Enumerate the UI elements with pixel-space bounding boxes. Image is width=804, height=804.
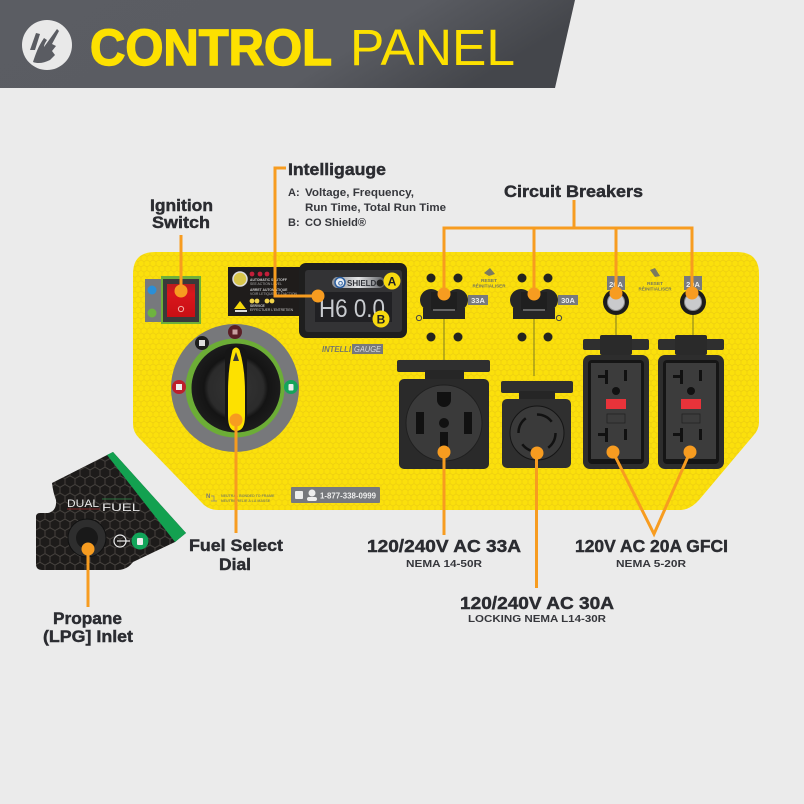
icon: inlet arrow (114, 535, 130, 547)
propane connector (68, 519, 106, 557)
reset labels: RÉINITIALISER (472, 282, 506, 290)
phone number tag (291, 487, 380, 503)
arrow: 30A outlet (535, 453, 538, 588)
label: propane inlet (43, 609, 133, 646)
arrow: fuel select dial (234, 420, 238, 533)
arrow: intelligauge (275, 168, 318, 296)
panel: yellow control panel (133, 252, 759, 510)
label: intelligauge: CO Shield® (305, 217, 366, 229)
label: ignition switch: Switch (152, 214, 210, 232)
arrow: propane inlet (86, 549, 90, 607)
label: ignition switch (150, 197, 213, 232)
fuel select dial (171, 324, 299, 452)
green band (107, 452, 186, 542)
dual fuel logo: FUEL (102, 502, 140, 514)
label: intelligauge: Voltage, Frequency, (305, 187, 414, 199)
warning sticker: VOIR LETIQUETTE D'ACTION (250, 292, 298, 296)
breaker 30A: 30A (561, 296, 575, 305)
label: 30A outlet: 120/240V AC 30A (460, 593, 614, 613)
badge B: B (377, 312, 386, 326)
leader dots (82, 284, 698, 556)
label: intelligauge: Intelligauge (288, 160, 386, 179)
outlet NEMA L14-30R (501, 381, 573, 468)
warning sticker: SEE ACTION LEVEL (250, 282, 282, 286)
label: fuel select dial (189, 536, 283, 574)
CO Shield badge: O (338, 280, 343, 288)
CO Shield badge (332, 277, 385, 288)
GFCI breaker 2: 20A (686, 280, 700, 289)
label: intelligauge: A: (288, 187, 300, 199)
arrow: circuit breakers (444, 200, 692, 294)
label: GFCI outlets: NEMA 5-20R (616, 558, 686, 570)
badge A: A (388, 274, 397, 288)
Intelligauge display (299, 263, 407, 338)
thin connector lines (444, 315, 693, 376)
title: PANEL (350, 19, 515, 76)
warning sticker: ARRET AUTOMATIQUE (250, 288, 288, 292)
label: propane inlet: (LPG] Inlet (43, 627, 133, 646)
reset labels: RESET (481, 278, 497, 284)
CO Shield badge: SHIELD (347, 279, 377, 288)
icon: propane tank (132, 532, 148, 550)
warning sticker: AUTOMATIC SHUTOFF (250, 278, 287, 282)
neutral bonding note: NEUTRAL BONDED TO FRAME (221, 494, 275, 498)
Intelligauge logo: GAUGE (354, 344, 381, 354)
label: 33A outlet (367, 536, 521, 570)
icon: hand pointing logo (22, 20, 72, 70)
reset labels: RESET (647, 281, 663, 287)
label: intelligauge: Run Time, Total Run Time (305, 202, 446, 214)
reset labels (472, 268, 672, 292)
title: CONTROL (90, 19, 332, 76)
GFCI breaker 1 (603, 276, 629, 315)
neutral bonding note: NEUTRE RELIE A LA MASSE (221, 499, 271, 503)
label: fuel select dial: Fuel Select (189, 536, 283, 555)
warning sticker: EFFECTUER L'ENTRETIEN (250, 308, 294, 312)
label: GFCI outlets: 120V AC 20A GFCI (575, 536, 728, 556)
reset labels: RÉINITIALISER (638, 284, 672, 292)
arrow: 33A outlet (442, 452, 446, 535)
warning sticker (228, 267, 303, 316)
ignition switch (145, 276, 201, 324)
title (90, 19, 515, 76)
dual fuel logo (67, 498, 140, 514)
dual fuel logo: DUAL (67, 498, 99, 510)
label: fuel select dial: Dial (219, 555, 251, 574)
breaker 33A: 33A (471, 296, 485, 305)
arrow: leader lines (88, 168, 692, 607)
label: ignition switch: Ignition (150, 197, 213, 215)
arrow: GFCI outlets (613, 452, 690, 534)
label: circuit breakers: Circuit Breakers (504, 182, 643, 201)
Intelligauge logo: INTELLI (322, 344, 352, 354)
breaker 33A (416, 289, 488, 321)
arrow: ignition switch (180, 235, 182, 291)
phone number tag: 1-877-338-0999 (320, 492, 377, 500)
label: 30A outlet: LOCKING NEMA L14-30R (468, 613, 606, 625)
Intelligauge logo (322, 344, 383, 354)
warning sticker: SERVICE (250, 304, 266, 308)
outlet GFCI right (658, 335, 724, 469)
readout: H6 0.0 (319, 295, 385, 323)
neutral bonding note: N (206, 494, 210, 500)
label: 33A outlet: NEMA 14-50R (406, 558, 482, 570)
breaker 30A (510, 289, 578, 321)
label: GFCI outlets (575, 536, 728, 570)
label: propane inlet: Propane (53, 609, 122, 628)
outlet NEMA 14-50R (397, 360, 490, 469)
label: intelligauge: B: (288, 217, 300, 229)
label: 30A outlet (460, 593, 614, 625)
label: 33A outlet: 120/240V AC 33A (367, 536, 521, 556)
header banner (0, 0, 575, 88)
outlet GFCI left (583, 335, 649, 469)
GFCI breaker 2 (680, 276, 706, 315)
screws (426, 274, 552, 342)
GFCI breaker 1: 20A (609, 280, 623, 289)
neutral bonding note (206, 494, 275, 503)
label: intelligauge (288, 160, 446, 229)
panel: dual fuel inlet (36, 452, 186, 570)
